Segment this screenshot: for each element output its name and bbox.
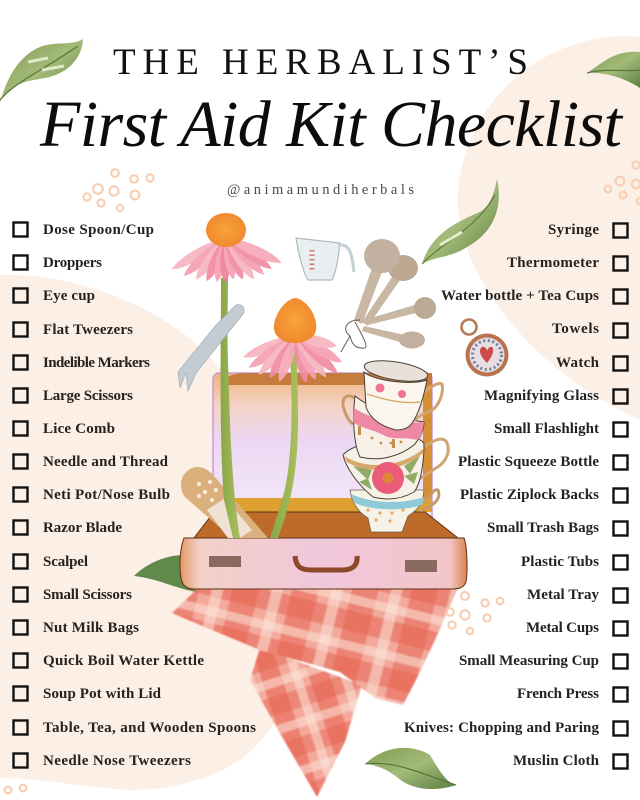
item — [548, 222, 628, 238]
leaf: middle right — [422, 179, 499, 264]
decorative dots: middle right — [435, 592, 503, 634]
item: Razor Blade — [43, 520, 122, 536]
checklist: left column — [14, 222, 256, 769]
title line: The Herbalist's: THE HERBALIST’S — [113, 42, 528, 83]
item: Small Flashlight — [494, 421, 599, 437]
illustration: cloth under suitcase — [172, 588, 458, 797]
suitcase front — [180, 538, 467, 589]
leaf: lower left behind suitcase — [134, 555, 196, 592]
leaf: bottom — [365, 748, 456, 789]
item: Flat Tweezers — [43, 322, 133, 338]
item: Droppers — [43, 255, 102, 271]
item: French Press — [517, 686, 599, 702]
lid right edge — [423, 385, 432, 500]
item: Needle Nose Tweezers — [43, 753, 191, 769]
item: Quick Boil Water Kettle — [43, 653, 204, 669]
item: Table, Tea, and Wooden Spoons — [43, 720, 256, 736]
item: Small Scissors — [43, 587, 132, 603]
item: Large Scissors — [43, 388, 133, 404]
item: Muslin Cloth — [513, 753, 600, 769]
illustration: measuring cup — [296, 238, 354, 280]
item: Plastic Ziplock Backs — [460, 487, 599, 503]
item — [14, 255, 102, 271]
illustration: pocket watch — [462, 320, 508, 376]
suitcase lid — [213, 373, 432, 523]
illustration: open suitcase — [180, 373, 467, 589]
decorative dots: top left — [83, 169, 154, 211]
leaf: top left — [0, 39, 83, 103]
item: Water bottle + Tea Cups — [441, 288, 599, 304]
item — [556, 355, 628, 371]
item — [14, 554, 88, 570]
item: Thermometer — [507, 255, 599, 271]
item — [14, 288, 95, 304]
suitcase handle — [295, 556, 357, 570]
peach blob: top right — [458, 36, 640, 420]
suitcase interior — [232, 498, 432, 512]
item: Lice Comb — [43, 421, 115, 437]
decorative dots: top right — [605, 161, 640, 204]
illustration: small coneflower — [241, 298, 344, 538]
illustration: bandage — [181, 467, 268, 538]
item: Small Trash Bags — [487, 520, 599, 536]
item: Magnifying Glass — [484, 388, 599, 404]
item: Soup Pot with Lid — [43, 686, 162, 702]
decorative dots: bottom left — [5, 785, 26, 793]
item: Scalpel — [43, 554, 88, 570]
illustration: tweezers — [178, 305, 244, 391]
item: Needle and Thread — [43, 454, 169, 470]
item: Indelible Markers — [43, 355, 150, 371]
illustration: measuring spoons — [341, 239, 436, 352]
peach blob: lower left — [0, 275, 300, 790]
item: Dose Spoon/Cup — [43, 222, 154, 238]
item: Nut Milk Bags — [43, 620, 139, 636]
item: Metal Cups — [526, 620, 599, 636]
item: Plastic Tubs — [521, 554, 599, 570]
third cup — [343, 437, 448, 499]
title line: First Aid Kit Checklist: First Aid Kit Checklist — [39, 88, 624, 161]
right latch — [405, 560, 437, 572]
illustration: large coneflower — [169, 213, 284, 538]
item — [552, 321, 628, 338]
item: Towels — [552, 321, 599, 337]
bottom cup — [350, 490, 439, 532]
checklist: right column — [404, 222, 628, 769]
lid top rim — [226, 373, 432, 385]
second cup — [343, 396, 424, 459]
item: Small Measuring Cup — [459, 653, 599, 669]
top cup — [363, 357, 442, 430]
social handle: @animamundiherbals — [227, 182, 414, 198]
item: Metal Tray — [527, 587, 600, 603]
item: Eye cup — [43, 288, 95, 304]
item: Syringe — [548, 222, 599, 238]
item: Plastic Squeeze Bottle — [458, 454, 599, 470]
illustration: stacked teacups — [343, 357, 448, 532]
item: Watch — [556, 355, 600, 371]
leaf: top right — [587, 52, 640, 88]
left latch — [209, 556, 241, 567]
item: Neti Pot/Nose Bulb — [43, 487, 170, 503]
item: Knives: Chopping and Paring — [404, 720, 600, 736]
